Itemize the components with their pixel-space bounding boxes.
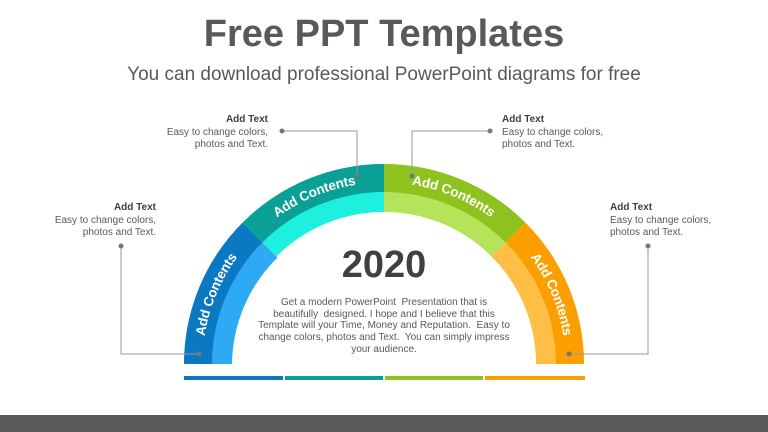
callout: top-left	[167, 114, 268, 150]
subtitle: You can download professional PowerPoint diagrams for free	[127, 64, 641, 85]
description paragraph: change colors, photos and Text. You can simply impress	[258, 332, 510, 343]
callout: top-right: Add Text	[502, 114, 544, 125]
description paragraph	[258, 297, 510, 355]
description paragraph: beautifully designed. I hope and I believe that this	[273, 309, 495, 320]
arc labels	[196, 176, 570, 336]
segment: teal	[243, 164, 384, 256]
callout: right: Add Text	[610, 202, 652, 213]
callout: right: Easy to change colors, photos and Text.	[610, 215, 711, 238]
callout: left: Add Text	[114, 202, 156, 213]
arc labels: Add Contents	[412, 176, 494, 216]
arc labels: Add Contents	[274, 178, 356, 218]
callout: right	[610, 202, 711, 238]
callout: left	[55, 202, 156, 238]
year heading: 2020	[342, 244, 426, 286]
callout: top-left: Easy to change colors, photos and Text.	[167, 127, 268, 150]
segment: orange	[492, 223, 584, 364]
callout: top-right: Easy to change colors, photos and Text.	[502, 127, 603, 150]
description paragraph: your audience.	[351, 344, 417, 355]
connector lines	[121, 131, 648, 354]
footer bar	[0, 415, 768, 432]
segment: blue	[184, 223, 278, 364]
segment: green	[384, 164, 525, 256]
bottom color bars	[184, 376, 585, 380]
arc labels: Add Contents	[530, 254, 570, 336]
callout: top-right	[502, 114, 603, 150]
description paragraph: Template will your Time, Money and Reputation. Easy to	[258, 320, 510, 331]
description paragraph: Get a modern PowerPoint Presentation that is	[281, 297, 487, 308]
callout: left: Easy to change colors, photos and Text.	[55, 215, 156, 238]
callout: top-left: Add Text	[226, 114, 268, 125]
title: Free PPT Templates	[204, 13, 564, 55]
arc labels: Add Contents	[196, 254, 236, 336]
